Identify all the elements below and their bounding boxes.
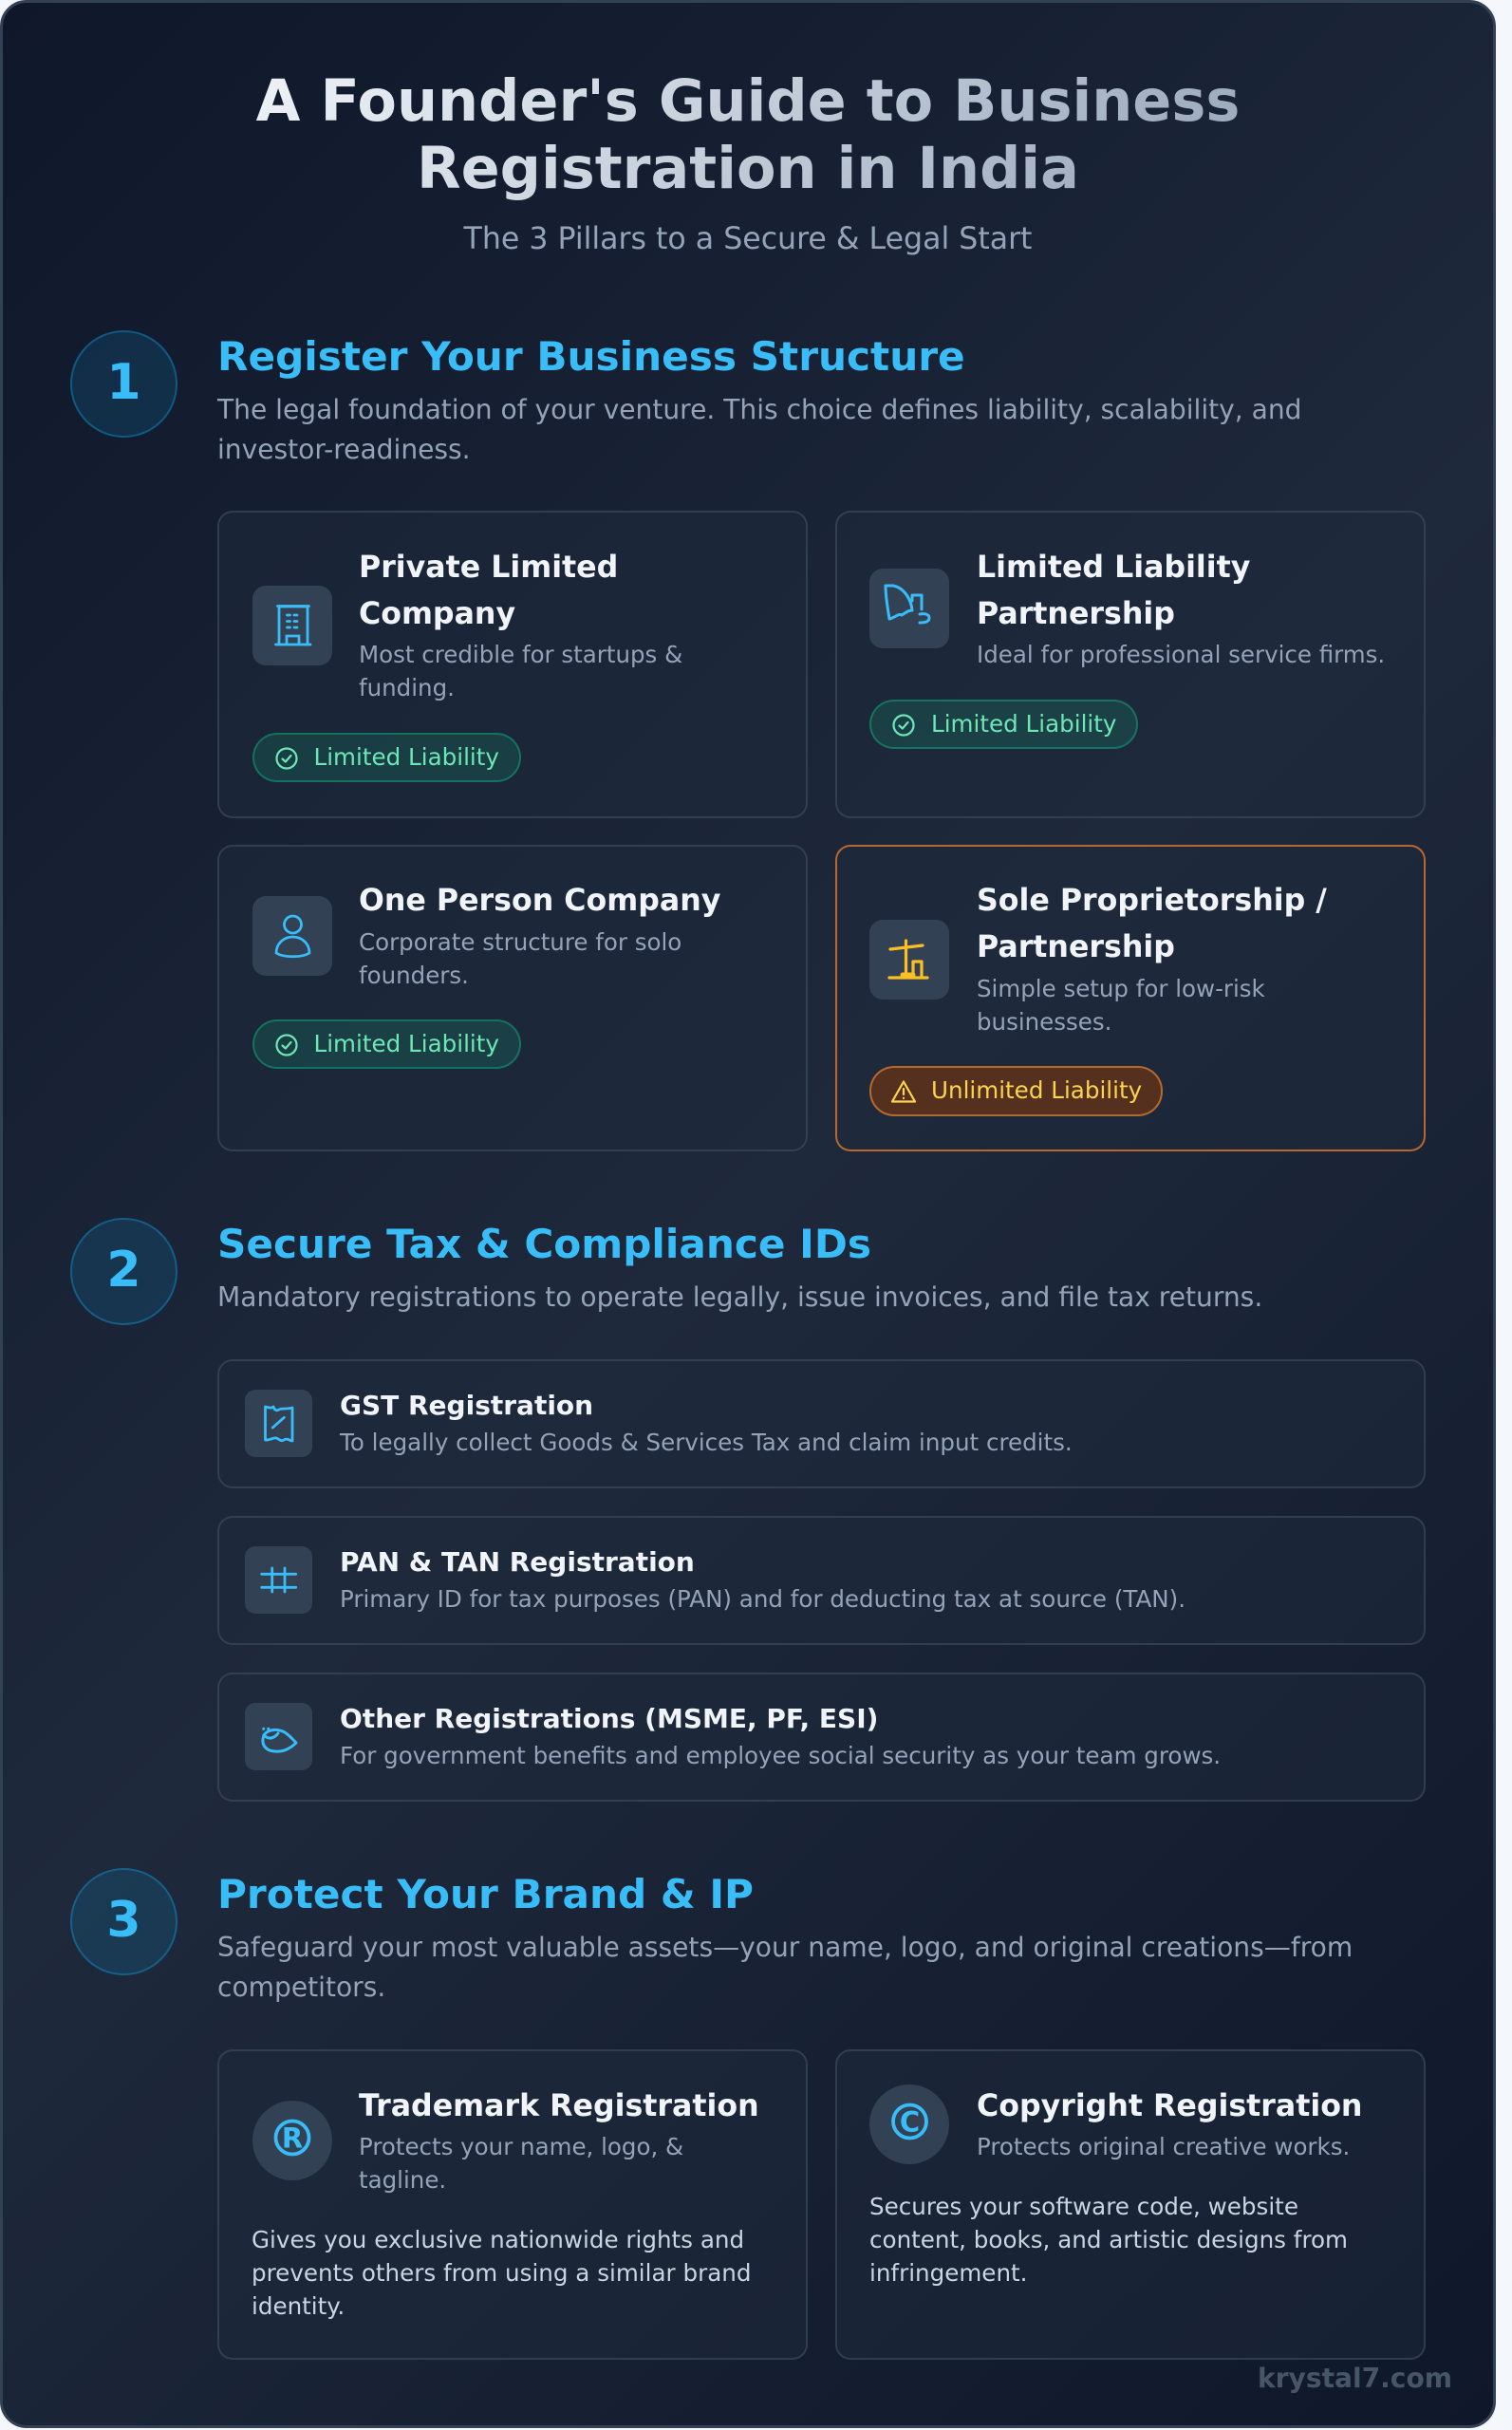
card description: tagline.	[359, 2166, 446, 2194]
card body text: identity.	[252, 2292, 345, 2320]
section 1 description: The legal foundation of your venture. This choice defines liability, scalability, and	[217, 394, 1301, 425]
badge: limited liability	[252, 1019, 520, 1069]
icon: registered mark: R	[281, 2122, 303, 2155]
icon: copyright mark	[869, 2084, 949, 2164]
section 1 heading: Register Your Business Structure	[217, 333, 965, 380]
row title: Other Registrations (MSME, PF, ESI)	[340, 1703, 878, 1734]
card description: Corporate structure for solo	[359, 928, 681, 956]
section 3 description: competitors.	[217, 1972, 385, 2003]
card description	[359, 641, 682, 701]
title: Registration in India	[417, 136, 1079, 202]
section 2 description: Mandatory registrations to operate legally, issue invoices, and file tax returns.	[217, 1281, 1262, 1313]
panel: gst registration	[217, 1359, 1426, 1488]
icon: registered mark	[252, 2101, 332, 2180]
card title: Copyright Registration	[977, 2089, 1362, 2123]
step number 1	[70, 330, 177, 438]
icon: person	[252, 896, 332, 976]
card title: Sole Proprietorship /	[977, 884, 1327, 918]
icon: receipt	[245, 1390, 312, 1457]
card body text	[869, 2193, 1348, 2287]
card description: Ideal for professional service firms.	[977, 641, 1385, 668]
card description: Protects original creative works.	[977, 2133, 1350, 2160]
card body text: prevents others from using a similar brand	[252, 2259, 751, 2287]
badge: unlimited liability	[869, 1066, 1163, 1116]
card title	[977, 551, 1250, 631]
section 1 description: investor-readiness.	[217, 434, 471, 465]
badge: limited liability	[252, 733, 520, 782]
badge: limited liability: Limited Liability	[313, 1029, 499, 1057]
card body text: Gives you exclusive nationwide rights and	[252, 2226, 744, 2253]
card description: funding.	[359, 674, 455, 701]
card description: Protects your name, logo, &	[359, 2133, 683, 2160]
badge: unlimited liability: Unlimited Liability	[931, 1076, 1142, 1103]
panel: private limited company	[217, 511, 808, 818]
card title: Partnership	[977, 597, 1175, 631]
title	[226, 68, 1270, 203]
section 3 heading: Protect Your Brand & IP	[217, 1871, 754, 1917]
panel: copyright registration	[835, 2049, 1426, 2360]
panel: sole proprietorship	[835, 845, 1426, 1151]
card title	[359, 551, 618, 631]
panel: other registrations	[217, 1673, 1426, 1802]
step number 3: 3	[106, 1892, 141, 1949]
card body text: infringement.	[869, 2259, 1027, 2287]
row description: For government benefits and employee social security as your team grows.	[340, 1742, 1221, 1769]
title: A Founder's Guide to Business	[256, 68, 1240, 135]
section 2 heading: Secure Tax & Compliance IDs	[217, 1221, 871, 1267]
icon: copyright mark: C	[900, 2105, 920, 2138]
card description	[359, 928, 681, 989]
badge: limited liability: Limited Liability	[931, 710, 1116, 737]
section 1 description	[216, 394, 1301, 465]
card description: businesses.	[977, 1008, 1111, 1036]
icon: crane	[869, 920, 949, 1000]
step number 1: 1	[106, 354, 141, 411]
card title: Private Limited	[359, 551, 618, 585]
card description	[977, 975, 1265, 1036]
row title: PAN & TAN Registration	[340, 1546, 695, 1578]
step number 2: 2	[106, 1242, 141, 1299]
card description: Most credible for startups &	[359, 641, 682, 668]
section 3 description: Safeguard your most valuable assets—your name, logo, and original creations—from	[217, 1932, 1353, 1963]
card body text: Secures your software code, website	[869, 2193, 1298, 2220]
panel: trademark registration	[217, 2049, 808, 2360]
card description: Simple setup for low-risk	[977, 975, 1265, 1002]
row description: To legally collect Goods & Services Tax and claim input credits.	[340, 1429, 1073, 1456]
card title	[977, 884, 1327, 964]
row title: GST Registration	[340, 1390, 593, 1421]
card title: Trademark Registration	[359, 2089, 759, 2123]
subtitle: The 3 Pillars to a Secure & Legal Start	[464, 222, 1032, 256]
icon: building	[252, 586, 332, 665]
card title: One Person Company	[359, 884, 720, 918]
panel: pan and tan registration	[217, 1516, 1426, 1645]
badge: limited liability: Limited Liability	[313, 742, 499, 771]
section 3 description	[217, 1932, 1353, 2003]
card body text: content, books, and artistic designs from	[869, 2226, 1348, 2253]
step number 2	[70, 1218, 177, 1325]
badge: limited liability	[869, 700, 1138, 749]
row description: Primary ID for tax purposes (PAN) and for deducting tax at source (TAN).	[340, 1585, 1185, 1613]
icon: hash	[245, 1546, 312, 1614]
card title: Partnership	[977, 930, 1175, 964]
card title: Limited Liability	[977, 551, 1250, 585]
icon: partnership	[869, 569, 949, 648]
step number 3	[70, 1868, 177, 1975]
watermark: krystal7.com	[1258, 2363, 1452, 2394]
card title: Company	[359, 597, 515, 631]
icon: fish	[245, 1703, 312, 1770]
panel: one person company	[217, 845, 808, 1151]
card description	[359, 2133, 683, 2194]
card description: founders.	[359, 962, 469, 989]
panel: limited liability partnership	[835, 511, 1426, 818]
card body text	[252, 2226, 751, 2320]
